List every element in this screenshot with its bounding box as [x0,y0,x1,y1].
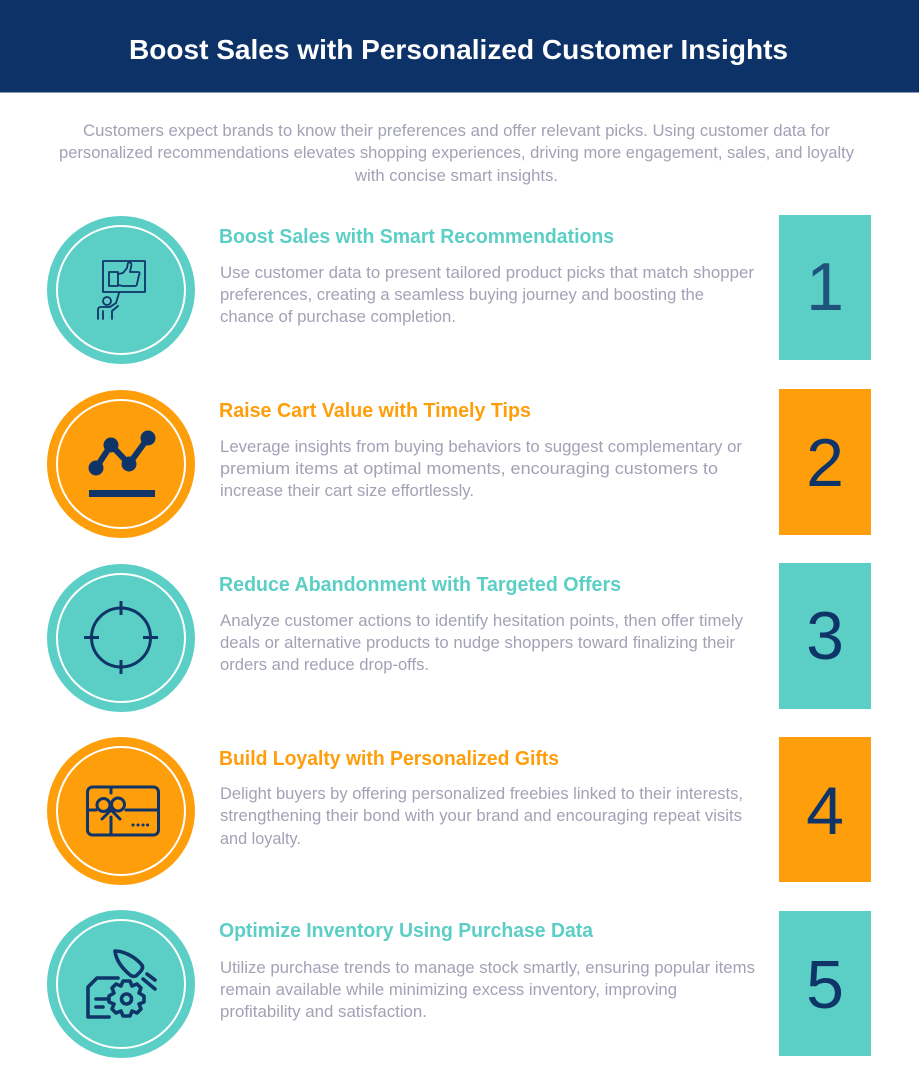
description: Utilize purchase trends to manage stock smartly, ensuring popular items [220,959,755,977]
icon: target crosshair in teal circle [47,564,195,712]
description: Use customer data to present tailored product picks that match shopper [220,264,755,282]
header banner [0,0,919,92]
panel: step 2 [47,389,871,538]
description: increase their cart size effortlessly. [220,482,474,500]
number tile 3: 3 [806,598,844,674]
number tile 1 [779,215,871,360]
description: Analyze customer actions to identify hesitation points, then offer timely [220,612,744,630]
description: remain available while minimizing excess inventory, improving [220,981,677,999]
heading: Optimize Inventory Using Purchase Data [219,920,594,942]
description [220,264,755,326]
description [220,785,743,848]
description: chance of purchase completion. [220,308,456,326]
intro text: personalized recommendations elevates shopping experiences, driving more engagement, sales, and loyalty [59,144,855,162]
number tile 4 [779,737,871,882]
description: and loyalty. [220,830,301,848]
description [220,959,755,1021]
description: preferences, creating a seamless buying journey and boosting the [220,286,704,304]
description [220,438,743,500]
icon: line chart in orange circle [47,390,195,538]
icon: rocket, document and gear in teal circle [47,910,195,1058]
number tile 3 [779,563,871,709]
description: strengthening their bond with your brand and encouraging repeat visits [220,807,742,825]
heading: Build Loyalty with Personalized Gifts [219,748,559,770]
panel: step 1 [47,215,871,364]
description: profitability and satisfaction. [220,1003,427,1021]
description: deals or alternative products to nudge shoppers toward finalizing their [220,634,736,652]
description: Leverage insights from buying behaviors to suggest complementary or [220,438,743,456]
description: premium items at optimal moments, encouraging customers to [220,459,718,478]
intro text: Customers expect brands to know their preferences and offer relevant picks. Using customer data for [83,122,831,140]
panel: step 3 [47,563,871,712]
description: orders and reduce drop-offs. [220,656,429,674]
number tile 4: 4 [806,773,844,849]
icon: gift card in orange circle [47,737,195,885]
number tile 5: 5 [806,947,844,1023]
intro text [59,122,855,185]
number tile 2 [779,389,871,535]
panel: step 5 [47,910,871,1058]
icon: thumbs up board in teal circle [47,216,195,364]
heading: Reduce Abandonment with Targeted Offers [219,574,621,596]
panel: step 4 [47,737,871,885]
number tile 5 [779,911,871,1056]
title: Boost Sales with Personalized Customer Insights [129,34,788,65]
heading: Boost Sales with Smart Recommendations [219,226,614,248]
number tile 1: 1 [806,249,844,325]
description: Delight buyers by offering personalized freebies linked to their interests, [220,785,743,803]
heading: Raise Cart Value with Timely Tips [219,400,531,422]
description [220,612,744,674]
number tile 2: 2 [806,425,844,501]
intro text: with concise smart insights. [354,167,558,185]
